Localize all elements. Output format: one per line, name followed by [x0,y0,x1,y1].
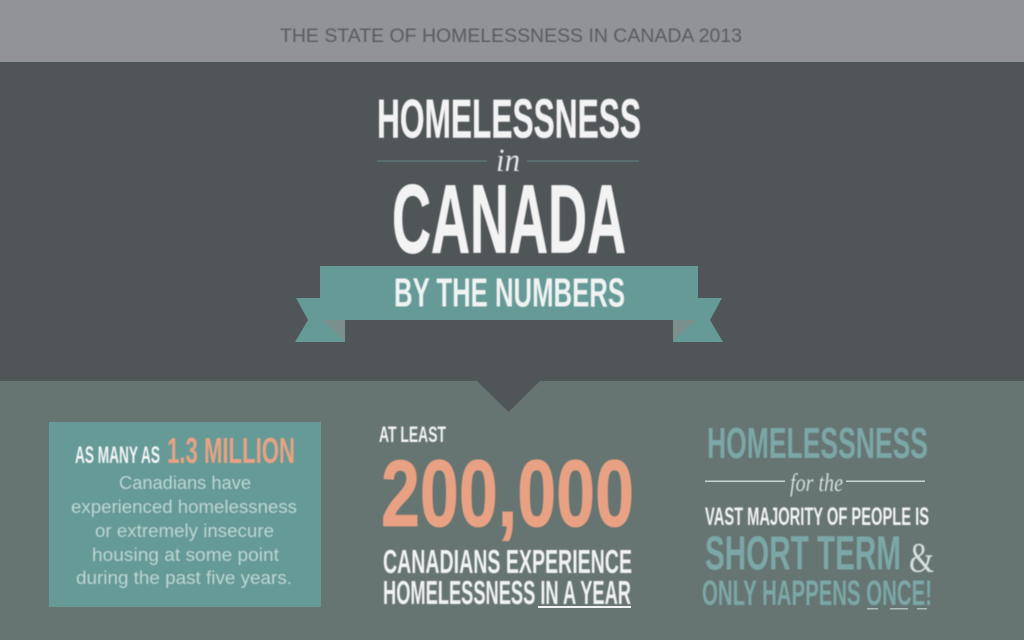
stat: short term: for the [790,470,843,497]
lower panel background with pointer [0,381,1024,640]
callout: 1.3 million: housing at some point [92,545,279,565]
callout: 1.3 million: experienced homelessness [71,497,297,517]
stat: 200,000: AT LEAST [379,422,446,447]
callout: 1.3 million: AS MANY AS [75,442,160,469]
stat: 200,000 [379,422,634,612]
title: HOMELESSNESS [377,88,641,150]
ribbon banner [295,266,723,342]
header panel background [0,62,1024,381]
stat: short term [702,419,934,613]
title: CANADA [392,164,626,274]
callout: 1.3 million [49,422,321,607]
callout: 1.3 million: during the past five years. [76,568,292,588]
stat: short term: & [909,536,934,582]
stat: 200,000: HOMELESSNESS IN A YEAR [383,575,631,612]
top bar [0,0,1024,62]
stat: 200,000: 200,000 [381,441,634,547]
callout: 1.3 million: 1.3 MILLION [167,430,295,471]
callout: 1.3 million: Canadians have [119,473,251,493]
top bar: THE STATE OF HOMELESSNESS IN CANADA 2013 [280,26,742,47]
callout: 1.3 million: or extremely insecure [95,521,274,541]
ribbon banner: BY THE NUMBERS [394,270,625,316]
stat: short term: SHORT TERM [705,528,901,580]
stat: 200,000: CANADIANS EXPERIENCE [383,544,632,581]
title: in [496,143,520,179]
title [377,88,641,274]
